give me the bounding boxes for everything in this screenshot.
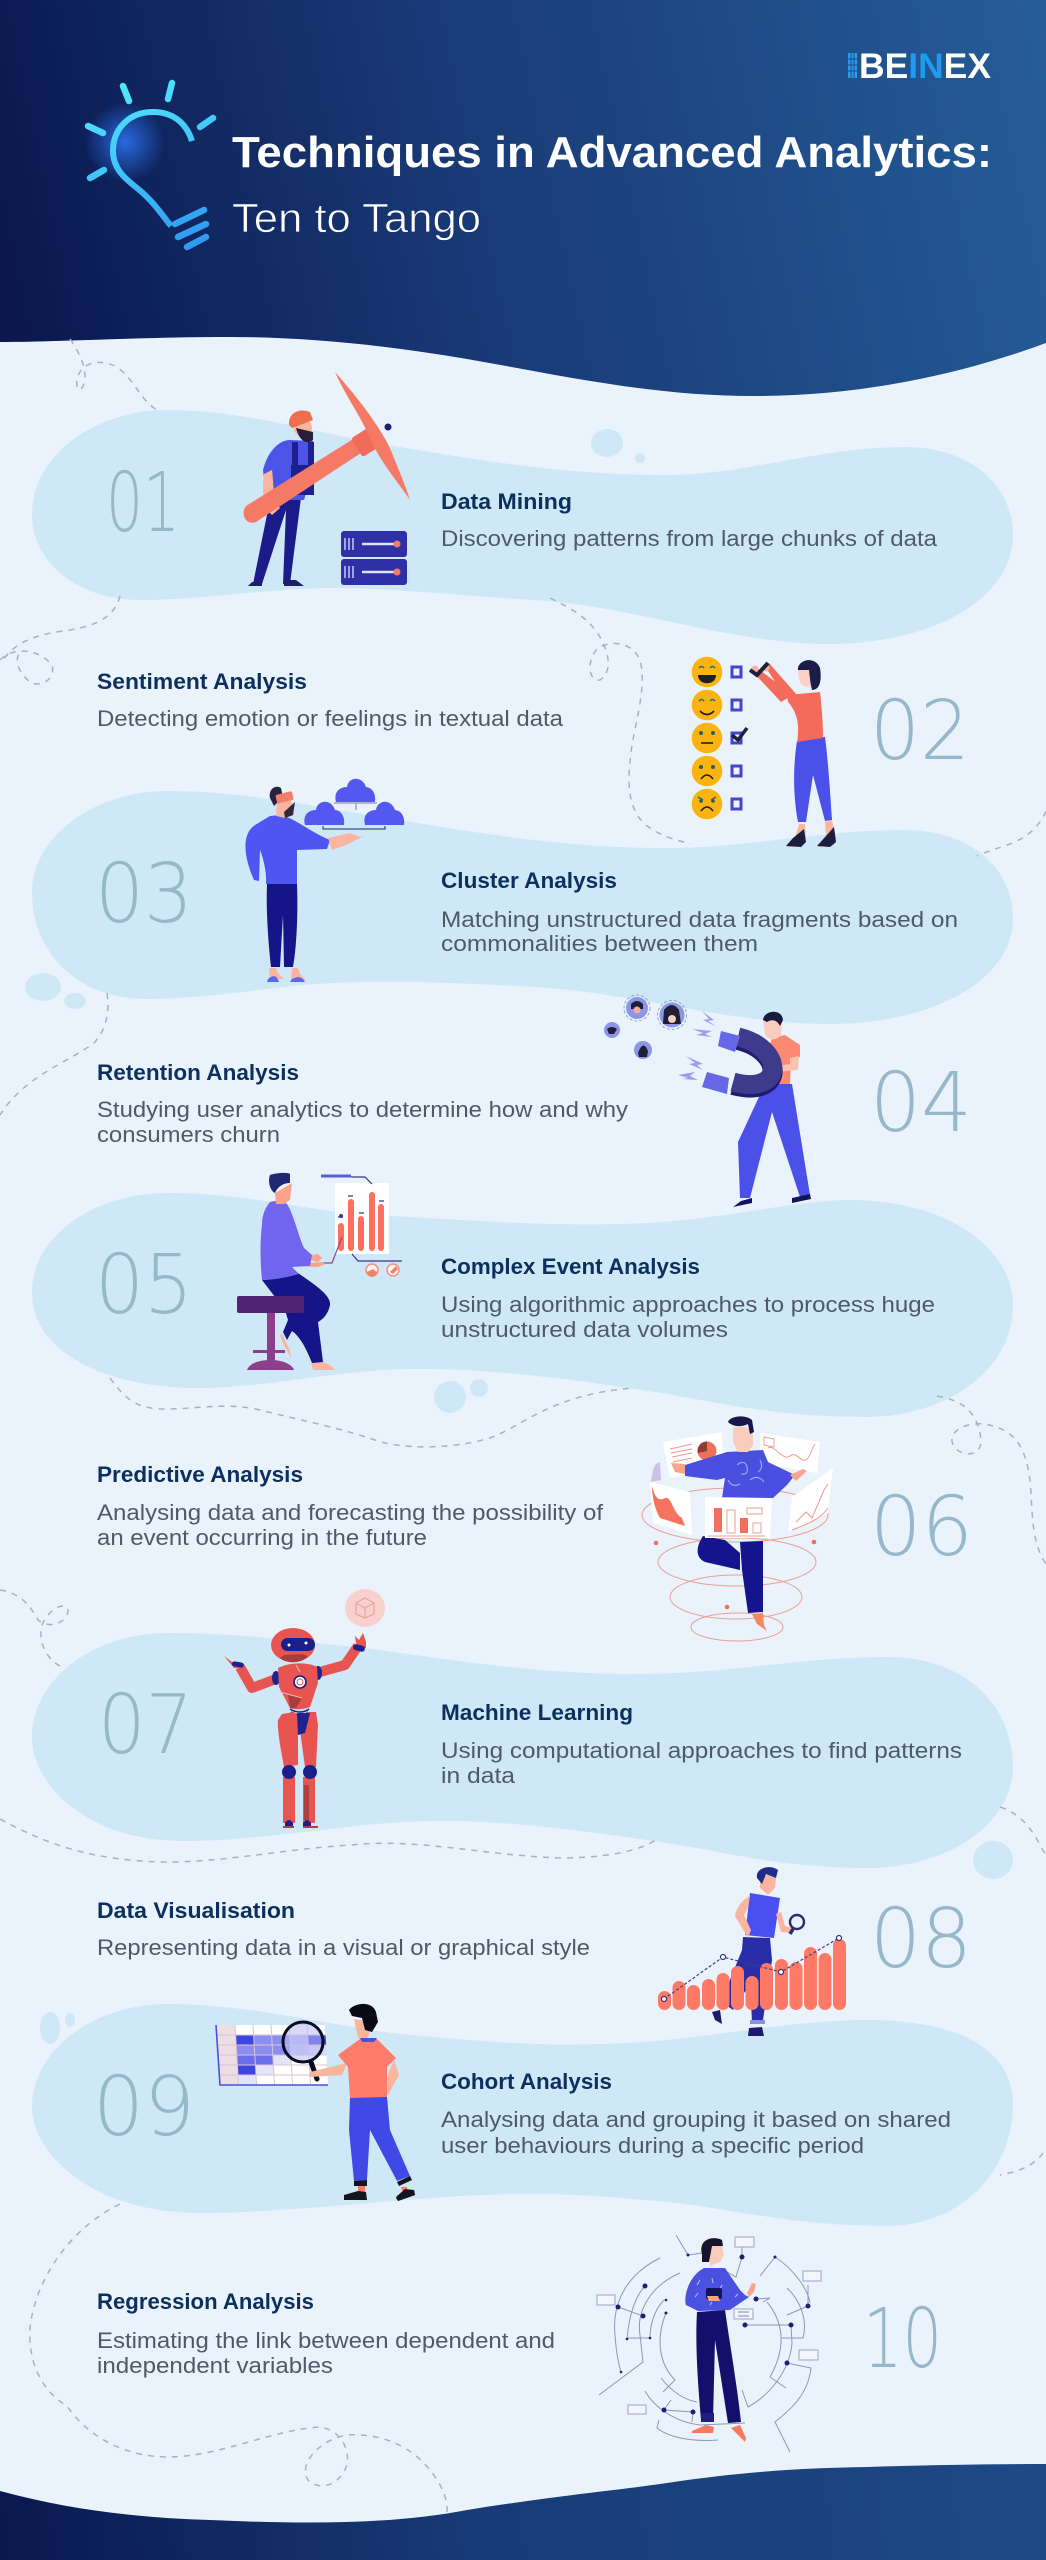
footer band bbox=[0, 2464, 1046, 2560]
illustration: man with floating dashboards bbox=[642, 1416, 833, 1641]
subtitle: Ten to Tango bbox=[232, 195, 481, 241]
illustration: man with VR headset and clouds bbox=[245, 779, 404, 982]
number 04: 04 bbox=[870, 1056, 972, 1151]
illustration: woman rating emoji sentiment bbox=[692, 657, 836, 847]
blob panel 09 bbox=[32, 2004, 1013, 2226]
number 02: 02 bbox=[870, 684, 970, 779]
blob panel 01 bbox=[32, 410, 1013, 644]
description: Retention Analysis: Studying user analytics to determine how and why bbox=[97, 1097, 628, 1122]
description: Complex Event Analysis bbox=[441, 1292, 935, 1342]
number 05: 05 bbox=[95, 1238, 193, 1333]
description: Regression Analysis: Estimating the link between dependent and bbox=[97, 2328, 555, 2353]
description: Data Mining: Discovering patterns from large chunks of data bbox=[441, 526, 938, 551]
heading: Data Visualisation: Data Visualisation bbox=[97, 1898, 295, 1923]
heading: Sentiment Analysis: Sentiment Analysis bbox=[97, 669, 307, 694]
illustration: miner with pickaxe and servers bbox=[244, 372, 410, 586]
number 07: 07 bbox=[98, 1678, 193, 1773]
description: Cluster Analysis bbox=[441, 907, 958, 956]
blob panel 03 bbox=[32, 791, 1013, 1024]
heading: Regression Analysis: Regression Analysis bbox=[97, 2289, 314, 2314]
blob panel 05 bbox=[32, 1193, 1013, 1417]
description: Cluster Analysis: commonalities between them bbox=[441, 931, 758, 956]
description: Cohort Analysis: Analysing data and grouping it based on shared bbox=[441, 2107, 951, 2132]
heading: Cohort Analysis: Cohort Analysis bbox=[441, 2069, 612, 2094]
number 03: 03 bbox=[95, 847, 193, 942]
number 10: 10 bbox=[863, 2292, 942, 2387]
blob panel 07 bbox=[32, 1633, 1013, 1868]
description: Predictive Analysis bbox=[97, 1500, 604, 1550]
header band bbox=[0, 0, 1046, 396]
droplet decorations bbox=[25, 429, 1013, 2044]
description: Machine Learning: in data bbox=[441, 1763, 516, 1788]
description: Retention Analysis: consumers churn bbox=[97, 1122, 280, 1147]
number 06: 06 bbox=[870, 1480, 973, 1575]
description: Machine Learning: Using computational approaches to find patterns bbox=[441, 1738, 962, 1763]
logo: BEINEX: BEINEX bbox=[859, 47, 992, 86]
description: Sentiment Analysis: Detecting emotion or feelings in textual data bbox=[97, 706, 564, 731]
icon: glowing light bulb bbox=[85, 83, 213, 247]
description: Regression Analysis bbox=[97, 2328, 555, 2378]
description: Data Visualisation: Representing data in a visual or graphical style bbox=[97, 1935, 590, 1960]
number 09: 09 bbox=[93, 2060, 195, 2155]
description: Cohort Analysis: user behaviours during a specific period bbox=[441, 2133, 864, 2158]
description: Machine Learning bbox=[441, 1738, 962, 1788]
heading: Complex Event Analysis: Complex Event Analysis bbox=[441, 1254, 700, 1279]
description: Predictive Analysis: an event occurring in the future bbox=[97, 1525, 427, 1550]
description: Predictive Analysis: Analysing data and forecasting the possibility of bbox=[97, 1500, 604, 1525]
description: Cohort Analysis bbox=[441, 2107, 951, 2158]
heading: Predictive Analysis: Predictive Analysis bbox=[97, 1462, 303, 1487]
illustration: robot with cube bbox=[224, 1589, 385, 1828]
heading: Data Mining: Data Mining bbox=[441, 489, 572, 514]
number 08: 08 bbox=[870, 1892, 972, 1987]
description: Complex Event Analysis: Using algorithmic approaches to process huge bbox=[441, 1292, 935, 1317]
illustration: man with magnifier over trend bars bbox=[658, 1867, 846, 2036]
description: Regression Analysis: independent variables bbox=[97, 2353, 333, 2378]
description: Cluster Analysis: Matching unstructured data fragments based on bbox=[441, 907, 958, 932]
illustration: man on stool with bar chart bbox=[237, 1173, 402, 1370]
illustration: man with magnet attracting customers bbox=[604, 995, 811, 1207]
illustration: woman with circuit diagram bbox=[597, 2235, 821, 2452]
heading: Cluster Analysis: Cluster Analysis bbox=[441, 868, 617, 893]
description: Retention Analysis bbox=[97, 1097, 628, 1147]
illustration: man inspecting cohort table bbox=[216, 2004, 415, 2201]
heading: Machine Learning: Machine Learning bbox=[441, 1700, 633, 1725]
description: Complex Event Analysis: unstructured data volumes bbox=[441, 1317, 728, 1342]
number 01: 01 bbox=[106, 456, 180, 551]
title: Techniques in Advanced Analytics: bbox=[232, 128, 992, 177]
heading: Retention Analysis: Retention Analysis bbox=[97, 1060, 299, 1085]
